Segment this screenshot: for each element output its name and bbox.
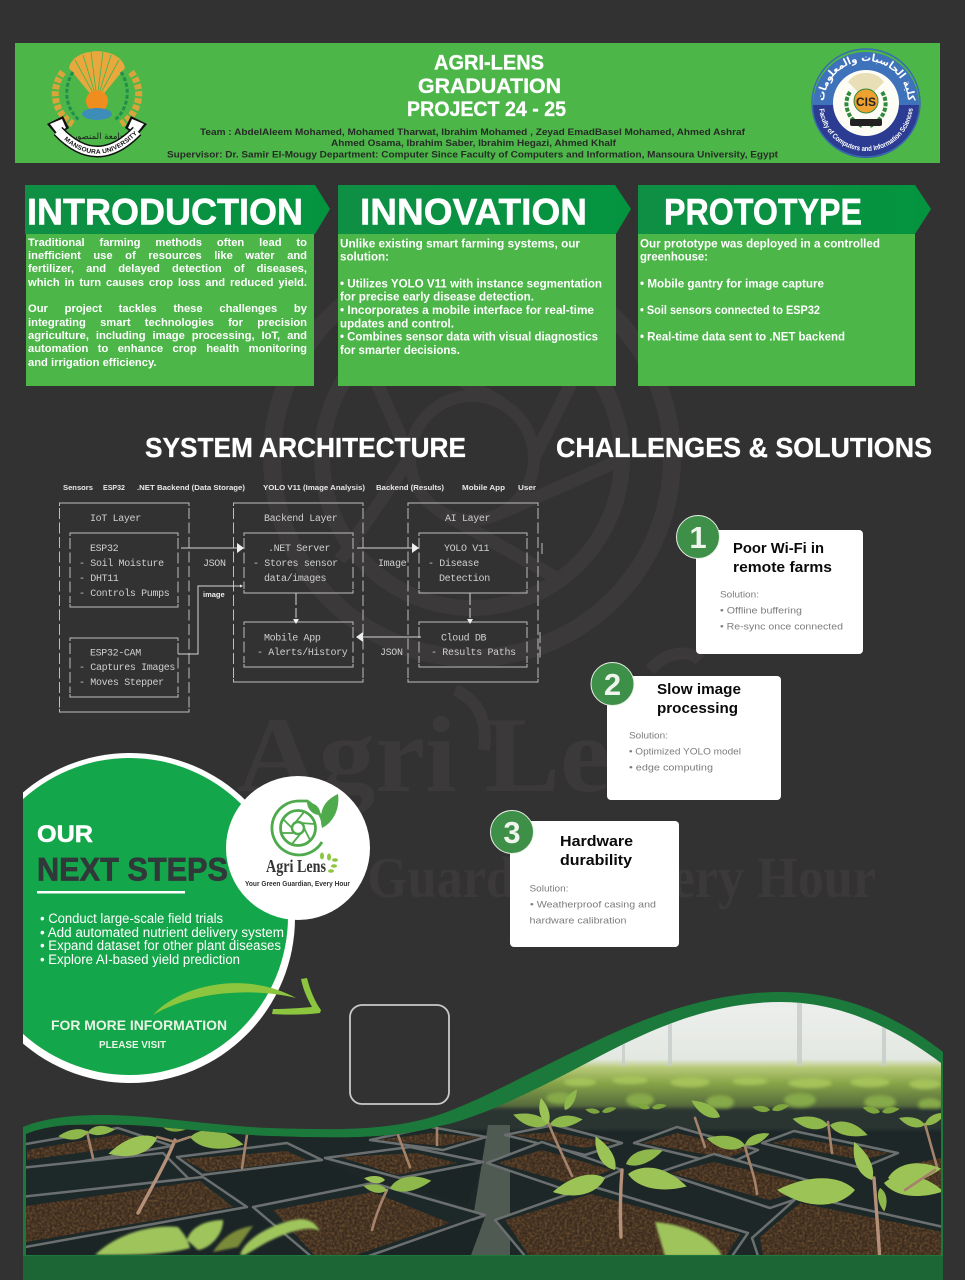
trays and soil [20,1125,948,1262]
flow labels: YOLO V11 (Image Analysis) [263,483,365,492]
card: challenge 2 [591,662,781,800]
panel: IoT layer: - Moves Stepper [79,678,164,689]
heading: challenges and solutions: CHALLENGES & SOLUTIONS [556,432,932,463]
panel: AI layer: - Results Paths [431,647,516,659]
arrow: .NET server to YOLO: Image [378,559,407,570]
flow labels [63,483,536,492]
text block: introduction: integrating smart technologies for precision [28,317,307,329]
card: challenge 1: remote farms [733,560,832,576]
card: challenge 3: hardware calibration [530,916,626,926]
heading: innovation: INNOVATION [360,192,587,232]
card: challenge 3 [490,810,679,947]
panel: IoT layer: - Soil Moisture [79,558,164,570]
card: challenge 1: Poor Wi-Fi in [733,541,824,557]
next steps list: • Add automated nutrient delivery system [40,925,284,940]
arrow: YOLO to cloud DB [467,593,473,624]
foreground blurred leaves [95,1219,722,1256]
number badge 2: 2 [604,667,621,702]
header banner [15,43,940,163]
heading: system architecture: SYSTEM ARCHITECTURE [145,432,466,463]
panel: our next steps: OUR [37,821,93,848]
card: challenge 2: processing [657,701,738,717]
panel: IoT layer: ESP32-CAM [90,648,141,660]
logo: Faculty of Computers and Information Sciences: CIS [856,95,876,109]
panel: AI layer: Detection [439,573,490,585]
logo: Agri Lens: Agri Lens [266,856,326,876]
background watermark: Agri Lens logo [272,258,700,750]
panel: backend layer: - Stores sensor [253,559,338,570]
logo: Agri Lens: Your Green Guardian, Every Hour [245,881,350,888]
next steps list: • Expand dataset for other plant diseases [40,938,281,953]
text block: innovation: updates and control. [340,318,454,330]
flow labels: Mobile App [462,483,505,492]
logo: Faculty of Computers and Information Sciences [811,48,921,158]
panel: AI layer: Cloud DB [441,632,487,644]
arrow: ESP32-CAM to .NET server: image [203,590,225,599]
background watermark: brand name: Agri Lens [237,696,717,815]
text block: prototype: • Soil sensors connected to ESP32 [640,305,820,317]
text block: innovation: • Incorporates a mobile interface for real-time [340,305,594,317]
number badge 1 [676,516,720,558]
next steps list: • Explore AI-based yield prediction [40,952,240,967]
text block: introduction: which in turn causes crop loss and reduced yield. [28,277,307,289]
panel: AI layer: AI Layer [445,514,491,525]
text block: introduction: and irrigation efficiency. [28,357,156,369]
arrow: .NET server to mobile app [293,593,299,624]
panel: backend layer: Backend Layer [264,513,338,525]
panel: backend layer: - Alerts/History [257,647,348,659]
panel: IoT layer: - Captures Images [79,663,175,674]
heading: introduction: INTRODUCTION [27,192,303,232]
panel: IoT layer: IoT Layer [90,514,141,525]
text block: innovation: • Utilizes YOLO V11 with instance segmentation [340,278,602,290]
text block: innovation: for smarter decisions. [340,345,460,357]
next steps list [40,911,284,967]
text block: innovation [340,238,602,357]
panel: our next steps: PLEASE VISIT [99,1040,166,1051]
panel: backend layer [234,503,363,682]
card: challenge 2: • Optimized YOLO model [629,746,741,758]
flow labels: User [518,483,536,492]
panel: prototype [638,185,931,386]
text block: prototype [640,238,880,344]
heading: innovation [338,185,631,234]
arrow: .NET server to YOLO [357,543,419,570]
card: challenge 1: • Re-sync once connected [720,622,843,632]
card: challenge 1: Solution: [720,590,759,600]
project title [407,52,566,121]
card: challenge 3: durability [560,853,632,869]
photo: greenhouse seedlings [20,990,950,1262]
text block: innovation: Unlike existing smart farming systems, our [340,238,581,250]
greenhouse roof [622,1000,886,1066]
card: challenge 3: Solution: [530,884,568,894]
panel: introduction [25,185,330,386]
panel: innovation [338,185,631,386]
team and supervisor credits: Team : AbdelAleem Mohamed, Mohamed Tharwat, Ibrahim Mohamed , Zeyad EmadBasel Mohamed, Ahmed Ashraf [200,127,746,138]
text block: innovation: solution: [340,252,389,264]
text block: prototype: • Real-time data sent to .NET backend [640,332,845,344]
text block: introduction: fertilizer, and delayed detection of diseases, [28,263,307,275]
text block: introduction: Traditional farming methods often lead to [28,237,307,249]
arrow: ESP32 to .NET server: JSON [203,559,226,570]
arrow: ESP32-CAM to .NET server [178,584,243,654]
card: challenge 3: • Weatherproof casing and [530,900,656,910]
flow labels: Backend (Results) [376,483,444,492]
project title: AGRI-LENS [434,52,544,74]
logo: Mansoura University: MANSOURA UNIVERSITY [64,130,136,154]
text block: introduction: inefficient use of resources like water and [28,250,307,262]
panel: AI layer: - Disease [428,558,479,570]
project title: GRADUATION [418,75,561,98]
panel: backend layer: Mobile App [264,632,321,644]
arrow: cloud DB to mobile app: JSON [380,648,403,659]
heading: prototype [638,185,931,234]
text block: prototype: • Mobile gantry for image capture [640,278,824,290]
card: challenge 1 [676,516,863,654]
arrow: to QR code [153,978,321,1015]
card: challenge 2: Solution: [629,730,668,742]
panel: our next steps: NEXT STEPS [37,852,228,888]
QR code frame [350,1005,449,1104]
flow labels: Sensors [63,483,93,492]
seedlings [58,1087,948,1262]
logo: Faculty of Computers and Information Sciences: كلية الحاسبات والمعلومات [818,54,916,100]
panel: AI layer: YOLO V11 [444,544,490,555]
panel: IoT layer: - DHT11 [79,574,119,585]
logo: Agri Lens [226,776,370,920]
flow labels: ESP32 [103,483,125,492]
card: challenge 2: • edge computing [629,762,713,774]
panel: our next steps [0,753,321,1083]
wave frame [23,992,943,1256]
logo: Mansoura University [47,51,147,158]
panel: backend layer: data/images [264,573,327,585]
background watermark: tagline: Guardian, Every Hour [367,845,876,910]
number badge 2 [591,662,634,706]
card: challenge 1: • Offline buffering [720,606,802,616]
flow labels: .NET Backend (Data Storage) [137,483,245,492]
logo: Mansoura University: جامعة المنصورة [69,132,125,142]
panel: IoT layer [60,503,189,712]
text block: introduction: agriculture, including image processing, IoT, and [28,330,307,342]
text block: introduction: automation to enhance crop health monitoring [28,343,307,355]
number badge 1: 1 [689,520,707,555]
panel: our next steps: FOR MORE INFORMATION [51,1017,227,1033]
text block: introduction: Our project tackles these challenges by [28,303,307,315]
text block: innovation: • Combines sensor data with visual diagnostics [340,332,598,344]
text block: prototype: Our prototype was deployed in a controlled [640,238,880,250]
bottom footer band [23,1255,943,1280]
team and supervisor credits [167,127,779,160]
next steps list: • Conduct large-scale field trials [40,911,223,926]
text block: prototype: greenhouse: [640,252,708,264]
distant seedlings [440,1076,950,1130]
arrow: ESP32 to .NET server [181,543,244,570]
team and supervisor credits: Supervisor: Dr. Samir El-Mougy Department: Computer Since Faculty of Computers and Information, Mansoura University, Egypt [167,150,779,160]
panel: IoT layer: ESP32 [90,544,119,555]
card: challenge 3: Hardware [560,834,633,850]
text block: innovation: for precise early disease detection. [340,292,534,304]
card: challenge 2: Slow image [657,682,741,698]
text block: introduction [28,237,310,382]
panel: backend layer: .NET Server [268,544,331,555]
team and supervisor credits: Ahmed Osama, Ibrahim Saber, Ibrahim Hegazi, Ahmed Khalf [331,138,617,149]
project title: PROJECT 24 - 25 [407,98,566,121]
number badge 3 [490,810,534,854]
heading: prototype: PROTOTYPE [664,192,862,232]
panel: IoT layer: - Controls Pumps [79,588,170,600]
logo: Faculty of Computers and Information Sciences: Faculty of Computers and Information Sciences [819,108,913,151]
chart: system architecture diagram [60,483,542,712]
arrow: cloud DB to mobile app [356,632,421,659]
number badge 3: 3 [503,815,521,850]
panel: AI layer [408,503,542,682]
